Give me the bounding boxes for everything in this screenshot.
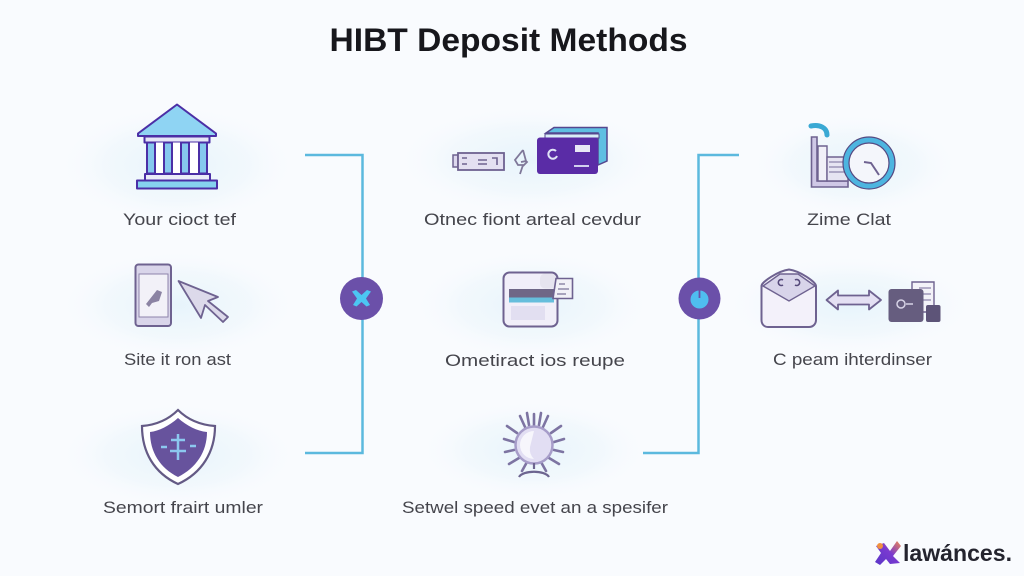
label: transfer: C peam ihterdinser (773, 350, 932, 369)
method: speed (402, 413, 668, 517)
title: HIBT Deposit Methods (330, 22, 688, 58)
method: security (103, 410, 263, 517)
icon: phone (136, 264, 171, 326)
method: mobile (124, 264, 231, 369)
icon: cyan hook (811, 125, 827, 135)
method: online form (445, 272, 625, 370)
icon: cursor arrow (178, 281, 228, 322)
icon: browser window (504, 272, 558, 326)
label: security: Semort frairt umler (103, 498, 263, 517)
node: left hub (340, 277, 383, 320)
method: time (807, 125, 895, 229)
icon: envelope (762, 270, 816, 327)
label: online form: Ometiract ios reupe (445, 351, 625, 370)
connector: right bracket (643, 155, 739, 453)
icon: credit cards (537, 128, 607, 174)
label: cards: Otnec fiont arteal cevdur (424, 210, 641, 229)
logo (875, 540, 1012, 566)
icon: factory (812, 137, 848, 187)
connector: left bracket (305, 155, 362, 453)
icon: radiant globe (504, 413, 564, 477)
label: speed: Setwel speed evet an a spesifer (402, 498, 668, 517)
icon: double arrow (826, 290, 881, 310)
icon: note (553, 278, 572, 298)
icon: clock (843, 137, 895, 189)
label: bank: Your cioct tef (123, 210, 236, 229)
icon: usb key (453, 153, 504, 170)
method: transfer (762, 270, 940, 369)
logo wordmark: lawánces. (903, 540, 1012, 566)
method: bank (123, 104, 236, 229)
icon: bolt (515, 150, 527, 174)
icon: shield (142, 410, 215, 484)
icon: folder documents (888, 282, 940, 322)
label: time: Zime Clat (807, 210, 891, 229)
method: cards (424, 128, 641, 229)
icon: bank building (137, 104, 217, 188)
node: right hub (678, 278, 720, 320)
icon: logo mark (875, 541, 901, 565)
label: mobile: Site it ron ast (124, 350, 231, 369)
